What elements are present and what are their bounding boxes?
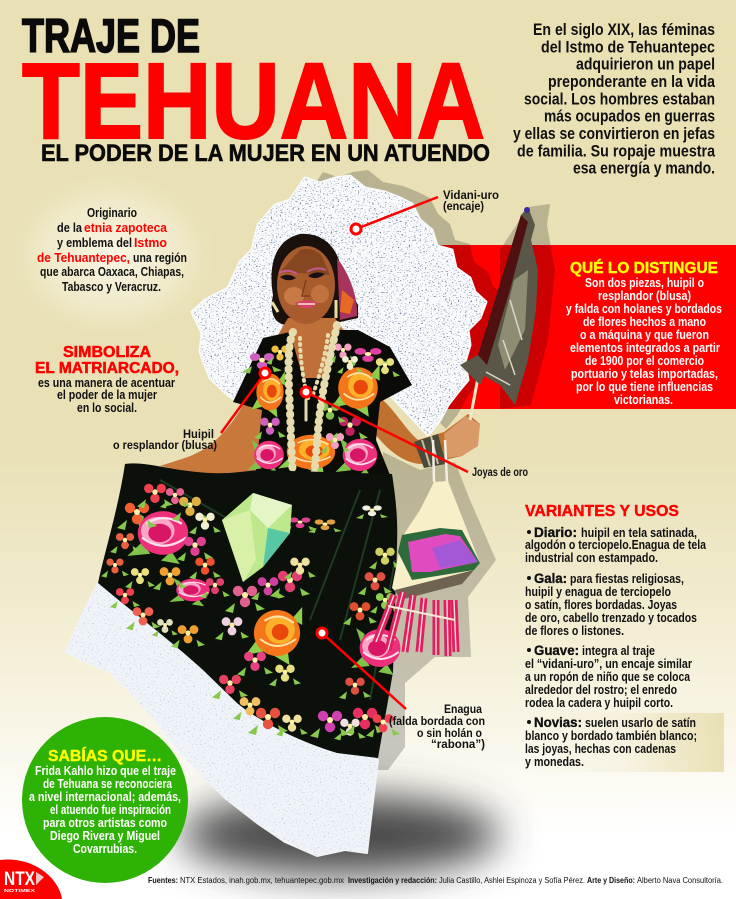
panel: sabías que: Covarrubias.	[73, 842, 137, 856]
scarf	[337, 258, 357, 320]
text block: originario: que abarca Oaxaca, Chiapas,	[40, 265, 184, 279]
label: joyas de oro: Joyas de oro	[472, 467, 528, 479]
gold necklaces	[286, 325, 337, 518]
footer credits: NTX Estados, inah.gob.mx, tehuantepec.gob.mx	[180, 876, 344, 885]
item: guave: Guave:	[534, 642, 579, 658]
text block: simboliza el matriarcado: el poder de la mujer	[57, 388, 157, 402]
callout: huipil pointer	[221, 368, 270, 433]
footer credits	[148, 876, 723, 885]
item: novias: y monedas.	[525, 755, 584, 769]
label: vidani-uro: (encaje)	[443, 201, 484, 213]
item: gala: de flores o listones.	[525, 624, 624, 638]
panel: qué lo distingue text: resplandor (blusa)	[598, 289, 691, 303]
logo: NTX Notimex: NTX	[4, 869, 35, 890]
text block: simboliza el matriarcado: en lo social.	[77, 401, 137, 415]
lace headdress (vidani-uro)	[190, 174, 488, 436]
text block: simboliza el matriarcado: SIMBOLIZA	[63, 344, 151, 361]
label: huipil	[113, 429, 217, 452]
flag and stick	[460, 207, 538, 420]
text block: simboliza el matriarcado	[35, 344, 179, 415]
item: gala: de oro, cabello trenzado y tocados	[525, 611, 697, 625]
logo: NTX Notimex	[0, 859, 62, 899]
item: gala	[525, 570, 697, 638]
label: enagua	[389, 704, 485, 751]
panel: sabías que: para otros artistas como	[43, 816, 167, 830]
text block: originario: Tabasco y Veracruz.	[62, 280, 161, 294]
item: guave: integra al traje	[582, 644, 655, 658]
text block: simboliza el matriarcado: EL MATRIARCADO,	[35, 360, 179, 377]
text block: originario: Originario	[87, 206, 137, 220]
ground shadow	[180, 795, 500, 875]
green handkerchief	[222, 493, 292, 582]
item: guave: el “vidani-uro”, un encaje similar	[525, 657, 692, 671]
title: TEHUANA	[22, 40, 485, 161]
footer credits: Investigación y redacción:	[348, 876, 437, 885]
panel: qué lo distingue text: o a máquina y que fueron	[580, 328, 709, 342]
item: diario: huipil en tela satinada,	[581, 526, 697, 540]
item: guave: rodea la cadera y huipil corto.	[525, 696, 673, 710]
panel: qué lo distingue text: Son dos piezas, huipil o	[585, 276, 704, 290]
panel: sabías que: el atuendo fue inspiración	[50, 803, 171, 817]
right arm and hand	[372, 396, 480, 468]
panel: qué lo distingue text: de flores hechos a mano	[583, 315, 706, 329]
item: gala: huipil y enagua de terciopelo	[525, 585, 671, 599]
footer credits: Fuentes:	[148, 876, 178, 885]
red band: qué lo distingue	[440, 245, 736, 409]
item: novias	[525, 714, 697, 769]
logo: NTX Notimex: NOTIMEX	[4, 888, 35, 893]
embroidered velvet skirt	[98, 463, 401, 758]
text block: simboliza el matriarcado: es una manera de acentuar	[38, 376, 175, 390]
footer credits: Alberto Nava Consultoría.	[637, 876, 723, 885]
item: guave: a un ropón de niño que se coloca	[525, 670, 691, 684]
lace skirt hem	[60, 575, 385, 865]
neck and chest	[272, 318, 352, 382]
footer credits: Arte y Diseño:	[587, 876, 635, 885]
panel: sabías que: a nivel internacional; además,	[29, 790, 181, 804]
label: enagua: Enagua	[444, 704, 483, 716]
woven bag	[376, 440, 480, 656]
item: novias: las joyas, hechas con cadenas	[525, 742, 676, 756]
panel: sabías que: de Tehuana se reconociera	[43, 777, 173, 791]
footer credits: Julia Castillo, Ashlei Espinoza y Sofía Pérez.	[439, 876, 585, 885]
text block: originario: etnia zapoteca	[84, 221, 168, 235]
label: huipil: Huipil	[183, 429, 214, 441]
label: enagua: o sin holán o	[417, 728, 482, 740]
item: diario: industrial con estampado.	[525, 551, 658, 565]
huipil blouse	[233, 330, 412, 480]
panel: sabías que: Frida Kahlo hizo que el traje	[35, 764, 176, 778]
item: gala: Gala:	[534, 570, 567, 586]
panel: qué lo distingue text: de 1900 por el comercio	[585, 354, 704, 368]
face	[272, 246, 336, 324]
title	[22, 9, 490, 167]
panel: qué lo distingue text: por lo que tiene influencias	[576, 380, 713, 394]
item: novias: Novias:	[534, 714, 582, 730]
text block: originario: de la	[57, 221, 83, 235]
item: novias: blanco y bordado también blanco;	[525, 729, 697, 743]
item: diario	[525, 524, 707, 565]
panel: sabías que	[22, 717, 188, 883]
item: novias: suelen usarlo de satín	[585, 716, 696, 730]
item: guave	[525, 642, 692, 710]
panel: qué lo distingue text	[566, 258, 722, 407]
heading: variantes y usos: VARIANTES Y USOS	[525, 503, 679, 520]
panel: sabías que: SABÍAS QUE…	[48, 746, 162, 765]
panel: qué lo distingue text: victorianas.	[614, 393, 673, 407]
panel: variantes y usos	[520, 503, 724, 772]
text block: originario: una región	[133, 251, 187, 265]
intro text	[513, 20, 715, 178]
novias highlight box	[520, 713, 724, 772]
item: diario: algodón o terciopelo.Enagua de tela	[525, 538, 707, 552]
label: huipil: o resplandor (blusa)	[113, 440, 217, 452]
label: enagua: (falda bordada con	[389, 716, 485, 728]
item: gala: para fiestas religiosas,	[570, 572, 684, 586]
label: vidani-uro: Vidani-uro	[443, 190, 499, 202]
item: guave: alrededor del rostro; el enredo	[525, 683, 677, 697]
title: EL PODER DE LA MUJER EN UN ATUENDO	[41, 140, 490, 167]
panel: qué lo distingue text: QUÉ LO DISTINGUE	[570, 258, 718, 277]
photo: woman in traje de tehuana	[60, 170, 538, 865]
hair	[271, 234, 358, 325]
figure drop shadows	[200, 170, 555, 770]
text block: originario: de Tehuantepec,	[37, 251, 130, 265]
panel: sabías que: Diego Rivera y Miguel	[50, 829, 160, 843]
label: vidani-uro	[443, 190, 499, 213]
callout: enagua pointer	[317, 628, 406, 709]
left arm	[160, 400, 266, 474]
text block: originario	[37, 206, 187, 294]
text block: originario: y emblema del	[57, 236, 132, 250]
text block: originario: Istmo	[134, 236, 167, 250]
callout: vidani-uro pointer	[351, 197, 438, 234]
item: diario: Diario:	[534, 524, 577, 540]
title: TRAJE DE	[22, 9, 200, 62]
callout: joyas pointer	[301, 387, 468, 472]
item: gala: o satín, flores bordadas. Joyas	[525, 598, 677, 612]
label: enagua: “rabona”)	[431, 739, 485, 751]
